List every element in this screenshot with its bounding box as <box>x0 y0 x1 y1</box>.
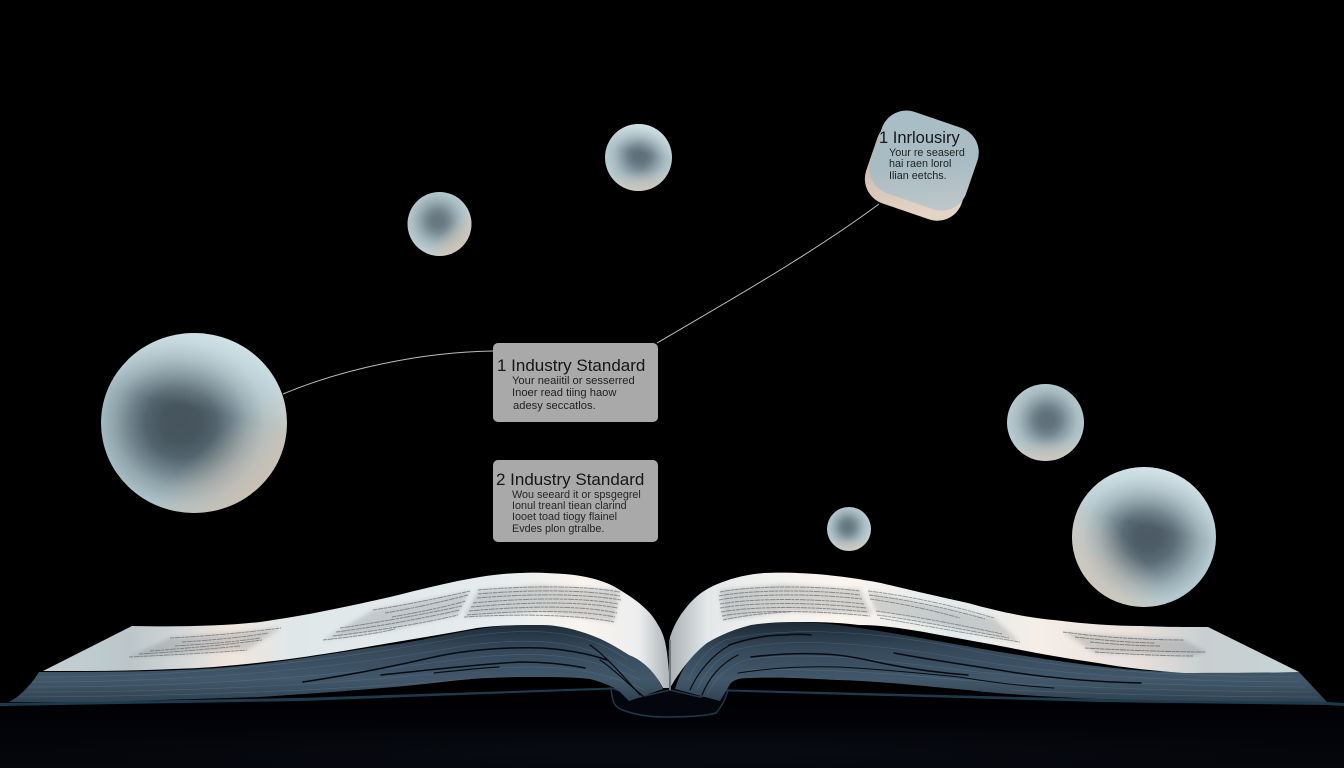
callout 1 body: adesy seccatlos. <box>513 400 596 412</box>
book spine <box>611 688 728 717</box>
printed text tone <box>129 584 1206 657</box>
connector: large sphere to callout 1 <box>283 351 493 394</box>
left page <box>43 573 670 688</box>
callout 2 heading: 2 Industry Standard <box>496 470 644 489</box>
centre gutter <box>669 640 671 690</box>
callout 2 body: Evdes plon gtralbe. <box>512 523 604 535</box>
right page block <box>675 622 1327 702</box>
left page printed lines <box>129 587 621 657</box>
card heading: 1 Inrlousiry <box>879 129 960 147</box>
callout 1 <box>493 343 658 422</box>
sphere: right middle <box>1007 384 1084 461</box>
dark page gaps <box>303 634 1141 697</box>
connector: callout 1 to rotated card <box>657 204 879 343</box>
callout 1 heading: 1 Industry Standard <box>497 356 645 375</box>
right page <box>669 573 1299 688</box>
open book <box>0 573 1344 717</box>
page edge striations <box>18 631 1318 697</box>
callout 2 body: Ionul treanl tiean clarind <box>512 500 627 512</box>
floor reflection <box>32 724 1312 768</box>
left page block <box>9 624 663 702</box>
sphere: large right <box>1072 467 1216 607</box>
card base <box>858 114 981 228</box>
book cover board <box>0 688 1344 706</box>
sphere: small lower middle <box>827 507 871 551</box>
sphere: upper centre-left <box>408 192 472 256</box>
callout 1 body <box>512 375 635 412</box>
right page printed lines <box>719 587 1206 656</box>
card body text: hai raen lorol <box>889 158 951 170</box>
sphere: large left <box>101 333 287 513</box>
callout 2 body: Iooet toad tiogy flainel <box>512 511 617 523</box>
callout 2 body: Wou seeard it or spsgegrel <box>512 489 641 501</box>
callout 2 body <box>512 489 641 535</box>
card body text: Ilian eetchs. <box>889 170 947 182</box>
sphere: top centre <box>605 124 672 191</box>
card body text: Your re seaserd <box>889 147 965 159</box>
card top face <box>862 103 986 218</box>
callout 1 body: Inoer read tiing haow <box>512 387 617 399</box>
callout 1 body: Your neaiitil or sesserred <box>512 375 635 387</box>
callout 2 <box>493 460 658 542</box>
rotated card <box>858 103 986 228</box>
card body text <box>889 147 965 182</box>
